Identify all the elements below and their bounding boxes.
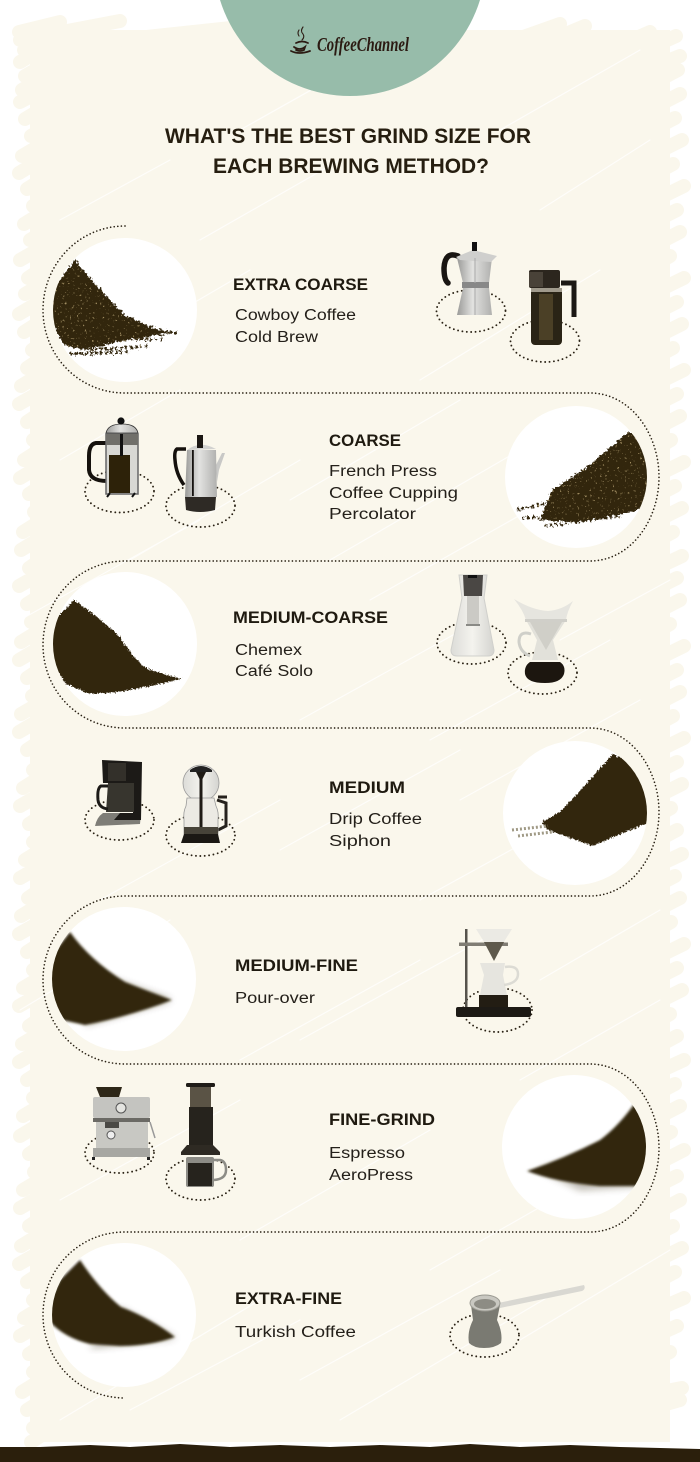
brew methods: Pour-over: [235, 990, 315, 1007]
brew methods: Espresso: [329, 1145, 405, 1162]
title: WHAT'S THE BEST GRIND SIZE FOR: [165, 125, 531, 148]
title: EACH BREWING METHOD?: [213, 155, 489, 178]
panel: medium-coarse: [50, 572, 577, 716]
brew methods: Café Solo: [235, 663, 313, 680]
brew methods: French Press: [329, 463, 437, 480]
brew methods: Chemex: [235, 642, 302, 659]
icon: chemex: [508, 599, 577, 694]
icon: pour-over stand: [456, 929, 532, 1032]
panel: extra-fine: [50, 1243, 585, 1387]
brew methods: Coffee Cupping: [329, 485, 458, 502]
icon: glass carafe: [437, 575, 506, 664]
brew methods: [329, 811, 422, 850]
icon: cold brew maker: [510, 270, 580, 362]
icon: moka pot: [436, 242, 506, 332]
icon: aeropress: [166, 1083, 235, 1200]
label: extra-fine: EXTRA-FINE: [235, 1289, 342, 1308]
brew methods: [329, 463, 458, 523]
dotted winding path: [43, 226, 659, 1398]
title: [165, 125, 531, 178]
logo: CoffeeChannel: CoffeeChannel: [317, 34, 409, 56]
icon: french press: [85, 417, 154, 512]
grind circle: coarse: [505, 406, 652, 548]
grind circle: medium-fine: [48, 907, 196, 1051]
icon: coffee cup with steam: [291, 27, 310, 53]
brew methods: [329, 1145, 413, 1184]
panel: medium: [85, 741, 650, 885]
icon: percolator: [166, 435, 235, 527]
panel: medium-fine: [48, 907, 532, 1051]
icon: siphon brewer: [166, 765, 235, 856]
brew methods: Cold Brew: [235, 329, 319, 346]
dark footer band: [0, 1444, 700, 1462]
panel: coarse: [85, 406, 652, 548]
brew methods: [235, 307, 356, 346]
brew methods: AeroPress: [329, 1167, 413, 1184]
label: medium: MEDIUM: [329, 778, 405, 797]
brew methods: Siphon: [329, 833, 391, 850]
grind circle: medium: [503, 741, 650, 885]
brew methods: Turkish Coffee: [235, 1324, 356, 1341]
brew methods: Percolator: [329, 506, 416, 523]
grind circle: extra coarse: [50, 238, 197, 382]
panel: fine-grind: [85, 1075, 652, 1219]
label: medium-coarse: MEDIUM-COARSE: [233, 608, 388, 627]
label: coarse: COARSE: [329, 431, 401, 450]
brew methods: Drip Coffee: [329, 811, 422, 828]
grind circle: extra-fine: [50, 1243, 196, 1387]
label: medium-fine: MEDIUM-FINE: [235, 956, 358, 975]
grind circle: medium-coarse: [50, 572, 197, 716]
green logo badge: [214, 0, 486, 96]
label: fine-grind: FINE-GRIND: [329, 1110, 435, 1129]
logo: CoffeeChannel: [291, 27, 409, 56]
icon: cezve: [450, 1285, 585, 1357]
grind circle: fine-grind: [502, 1075, 652, 1219]
icon: espresso machine: [85, 1087, 155, 1173]
brew methods: Cowboy Coffee: [235, 307, 356, 324]
brew methods: [235, 642, 313, 680]
label: extra coarse: EXTRA COARSE: [233, 275, 368, 294]
icon: drip coffee machine: [85, 760, 154, 840]
panel: extra coarse: [50, 238, 580, 382]
